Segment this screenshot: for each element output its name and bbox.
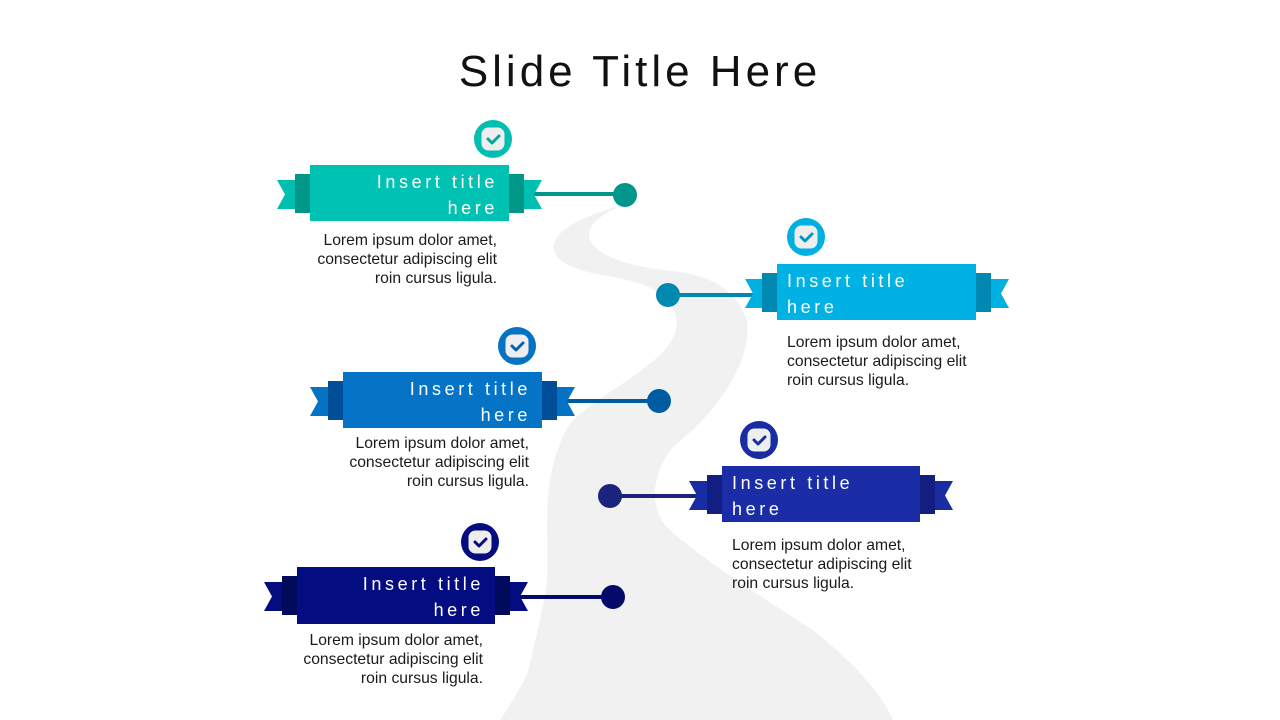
banner 5: here — [434, 600, 484, 620]
icon — [740, 421, 778, 459]
road — [500, 203, 893, 720]
banner 4: consectetur adipiscing elit — [732, 556, 912, 573]
banner 1 — [277, 120, 637, 287]
banner 5: Lorem ipsum dolor amet, — [309, 632, 483, 649]
title: Slide Title Here — [459, 47, 821, 96]
icon — [498, 327, 536, 365]
banner 1: roin cursus ligula. — [375, 270, 497, 287]
banner 4: Lorem ipsum dolor amet, — [732, 537, 906, 554]
banner 5: Insert title — [363, 574, 484, 594]
banner 2: consectetur adipiscing elit — [787, 353, 967, 370]
banner 3: here — [481, 405, 531, 425]
banner 5: consectetur adipiscing elit — [303, 651, 484, 668]
icon — [461, 523, 499, 561]
banner 3: Insert title — [410, 379, 531, 399]
banner 5: roin cursus ligula. — [361, 670, 483, 687]
banner 2 — [656, 218, 1009, 389]
icon — [787, 218, 825, 256]
banner 1: Insert title — [377, 172, 498, 192]
banner 4: roin cursus ligula. — [732, 575, 854, 592]
banner 5 — [264, 523, 625, 687]
banner 4: Insert title — [732, 473, 853, 493]
banner 2: roin cursus ligula. — [787, 372, 909, 389]
banner 1: here — [448, 198, 498, 218]
banner 3: Lorem ipsum dolor amet, — [355, 435, 529, 452]
banner 2: Insert title — [787, 271, 908, 291]
banner 3: roin cursus ligula. — [407, 473, 529, 490]
banner 1: consectetur adipiscing elit — [317, 251, 498, 268]
banner 2: here — [787, 297, 837, 317]
banner 1: Lorem ipsum dolor amet, — [323, 232, 497, 249]
icon — [474, 120, 512, 158]
banner 2: Lorem ipsum dolor amet, — [787, 334, 961, 351]
banner 4: here — [732, 499, 782, 519]
banner 3 — [310, 327, 671, 490]
banner 3: consectetur adipiscing elit — [349, 454, 530, 471]
banner 4 — [598, 421, 953, 592]
